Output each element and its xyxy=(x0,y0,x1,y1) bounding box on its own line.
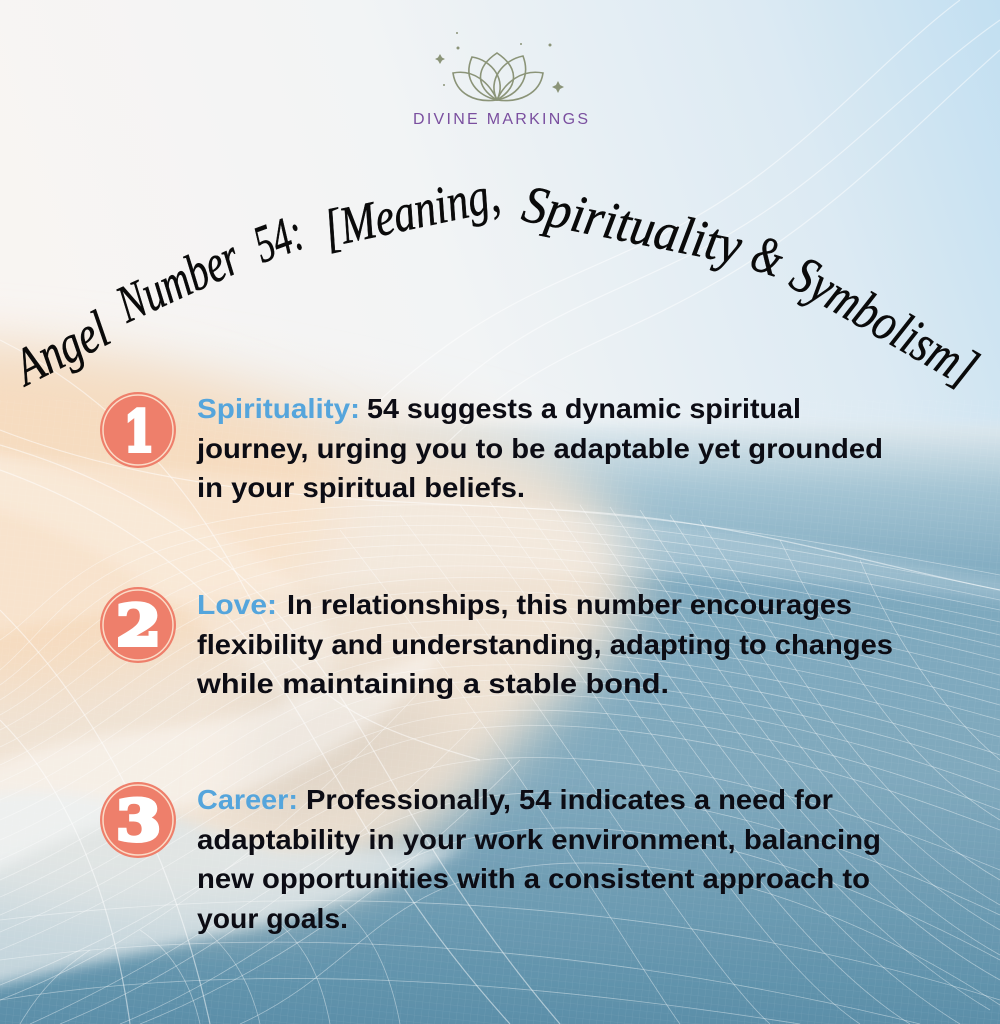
icon: lotus xyxy=(453,53,543,101)
title: Angel xyxy=(3,301,119,398)
title: Spirituality xyxy=(518,175,747,276)
badge 3: 3 xyxy=(116,788,161,854)
badge 2 xyxy=(100,587,176,663)
title: & xyxy=(744,224,791,289)
badge 3 xyxy=(100,782,176,858)
title: 54: xyxy=(246,203,311,274)
badge 1 xyxy=(100,392,176,468)
text block 2: Love: xyxy=(197,589,277,620)
icon: stars xyxy=(435,32,564,93)
badge 1: 1 xyxy=(124,399,154,465)
text block 1: journey, urging you to be adaptable yet grounded xyxy=(196,433,883,464)
text block 2: while maintaining a stable bond. xyxy=(196,668,669,699)
title xyxy=(3,165,988,398)
text block 1 xyxy=(196,393,883,503)
logo: Divine Markings xyxy=(413,32,588,128)
text block 3: new opportunities with a consistent approach to xyxy=(197,863,870,894)
text block 3: Career: xyxy=(197,784,298,815)
text block 3: adaptability in your work environment, balancing xyxy=(197,824,881,855)
title: Number xyxy=(107,228,249,334)
text block 1: 54 suggests a dynamic spiritual xyxy=(367,393,801,424)
title: [Meaning, xyxy=(318,165,505,259)
text block 3: your goals. xyxy=(197,903,348,934)
item 3: career xyxy=(100,782,881,934)
item 1: spirituality xyxy=(100,392,883,503)
text block 3 xyxy=(197,784,881,934)
brand name: DIVINE MARKINGS xyxy=(413,111,588,128)
text block 2 xyxy=(196,589,893,699)
text block 2: flexibility and understanding, adapting to changes xyxy=(197,629,893,660)
text block 1: in your spiritual beliefs. xyxy=(197,472,525,503)
badge 2: 2 xyxy=(116,593,161,659)
text block 3: Professionally, 54 indicates a need for xyxy=(306,784,833,815)
item 2: love xyxy=(100,587,893,699)
text block 1: Spirituality: xyxy=(197,393,360,424)
text block 2: In relationships, this number encourages xyxy=(287,589,852,620)
